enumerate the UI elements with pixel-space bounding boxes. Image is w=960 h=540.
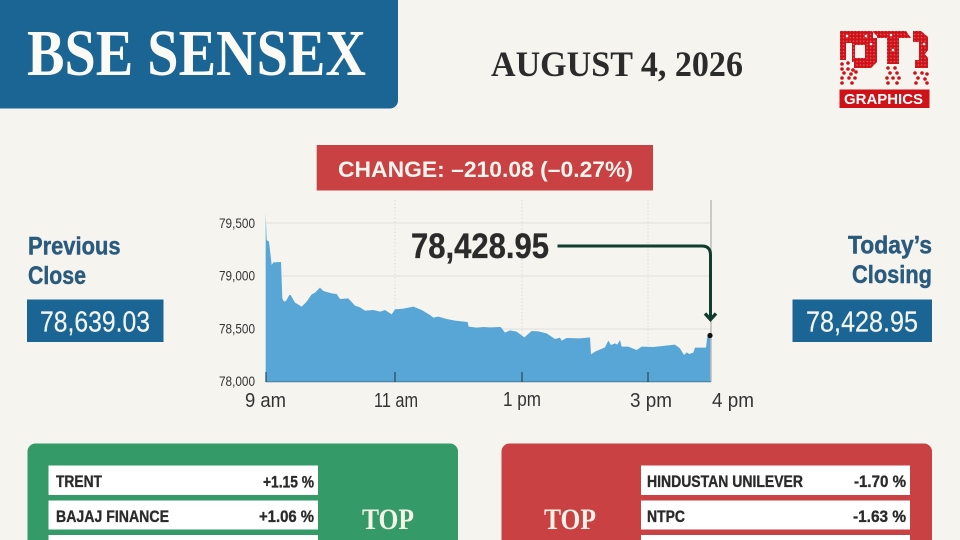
previous close block — [27, 232, 164, 342]
loser row: partly cropped — [641, 535, 910, 540]
gainer row: Trent: TRENT — [56, 472, 102, 491]
date: AUGUST 4, 2026 — [491, 44, 743, 84]
gainer row: partly cropped — [48, 535, 318, 540]
today's closing block — [792, 231, 932, 342]
closing value annotation: 78,428.95 — [411, 226, 549, 266]
icon: PTI Graphics logo — [840, 31, 930, 108]
change callout: CHANGE: –210.08 (–0.27%) — [338, 157, 633, 182]
previous close value — [27, 300, 164, 342]
gainers heading: TOP — [362, 503, 414, 536]
loser row: NTPC: NTPC — [647, 507, 685, 526]
x axis labels: 4 pm — [712, 390, 754, 412]
y axis labels: 78,000 — [219, 373, 255, 389]
x axis labels: 3 pm — [630, 390, 672, 412]
previous close label: Previous — [28, 232, 120, 260]
y axis labels — [219, 215, 255, 389]
gainer row: Bajaj Finance: BAJAJ FINANCE — [56, 507, 169, 526]
losers heading: TOP — [544, 503, 596, 536]
previous close label: Close — [28, 262, 86, 290]
x axis labels: 9 am — [245, 390, 286, 412]
x axis labels: 11 am — [374, 390, 418, 412]
area chart — [219, 200, 754, 412]
y axis labels: 79,500 — [219, 215, 255, 231]
arrow to closing point — [558, 246, 716, 320]
x axis labels: 1 pm — [503, 389, 541, 411]
today's closing block: 78,428.95 — [806, 307, 918, 339]
y axis labels: 78,500 — [219, 321, 255, 337]
gainer row: Trent: +1.15 % — [263, 472, 314, 492]
loser row: NTPC: -1.63 % — [853, 507, 906, 526]
title: BSE SENSEX — [27, 17, 366, 90]
closing point marker — [707, 333, 713, 338]
gainer row: Trent — [48, 466, 318, 495]
loser row: NTPC — [641, 500, 910, 530]
icon: PTI Graphics logo: GRAPHICS — [844, 91, 923, 108]
loser row: Hindustan Unilever: -1.70 % — [854, 472, 906, 491]
today's closing value — [792, 300, 932, 342]
loser row: Hindustan Unilever — [641, 466, 910, 495]
y axis labels: 79,000 — [219, 268, 255, 284]
logo label — [840, 90, 930, 108]
gainer row: Bajaj Finance — [48, 500, 318, 530]
previous close block: 78,639.03 — [40, 307, 150, 339]
gainer row: Bajaj Finance: +1.06 % — [259, 507, 314, 526]
today's closing label: Closing — [852, 261, 932, 289]
change callout — [317, 145, 653, 190]
today's closing label: Today’s — [848, 231, 932, 259]
x axis labels — [245, 389, 754, 412]
panel: top gainers — [28, 444, 458, 540]
title banner — [0, 0, 398, 108]
loser row: Hindustan Unilever: HINDUSTAN UNILEVER — [647, 472, 803, 491]
panel: top losers — [502, 444, 932, 540]
